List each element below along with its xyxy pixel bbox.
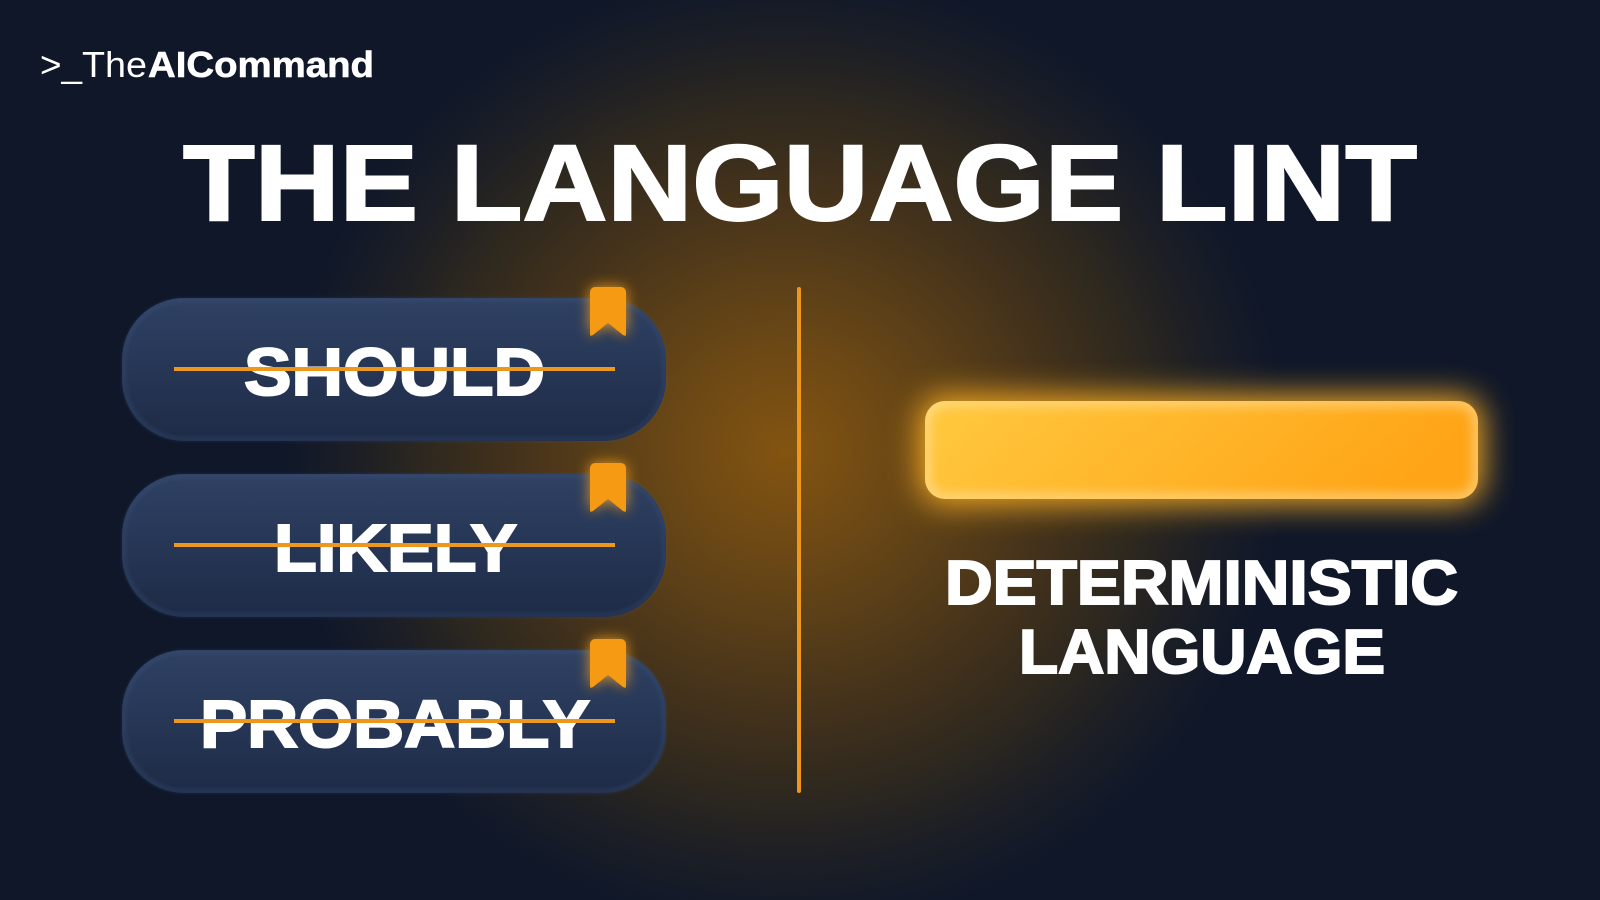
pill: LIKELY xyxy=(122,463,666,617)
pill: PROBABLY: PROBABLY xyxy=(200,687,590,762)
vertical divider xyxy=(797,287,801,793)
label: deterministic language: DETERMINISTIC xyxy=(945,549,1458,618)
pill: LIKELY: LIKELY xyxy=(274,511,517,586)
logo: TheAICommand: >_ xyxy=(40,44,83,85)
pill: PROBABLY xyxy=(122,639,666,793)
glowing deterministic bar xyxy=(920,396,1483,504)
logo: TheAICommand: AICommand xyxy=(148,44,374,85)
label: deterministic language: LANGUAGE xyxy=(1019,618,1385,687)
pill: SHOULD xyxy=(122,287,666,441)
label: deterministic language xyxy=(945,549,1458,687)
logo: TheAICommand xyxy=(40,44,374,85)
logo: TheAICommand: The xyxy=(82,44,147,85)
title: THE LANGUAGE LINT xyxy=(183,122,1417,243)
panel: struck-out hedge words xyxy=(122,287,666,793)
pill: SHOULD: SHOULD xyxy=(244,335,545,410)
